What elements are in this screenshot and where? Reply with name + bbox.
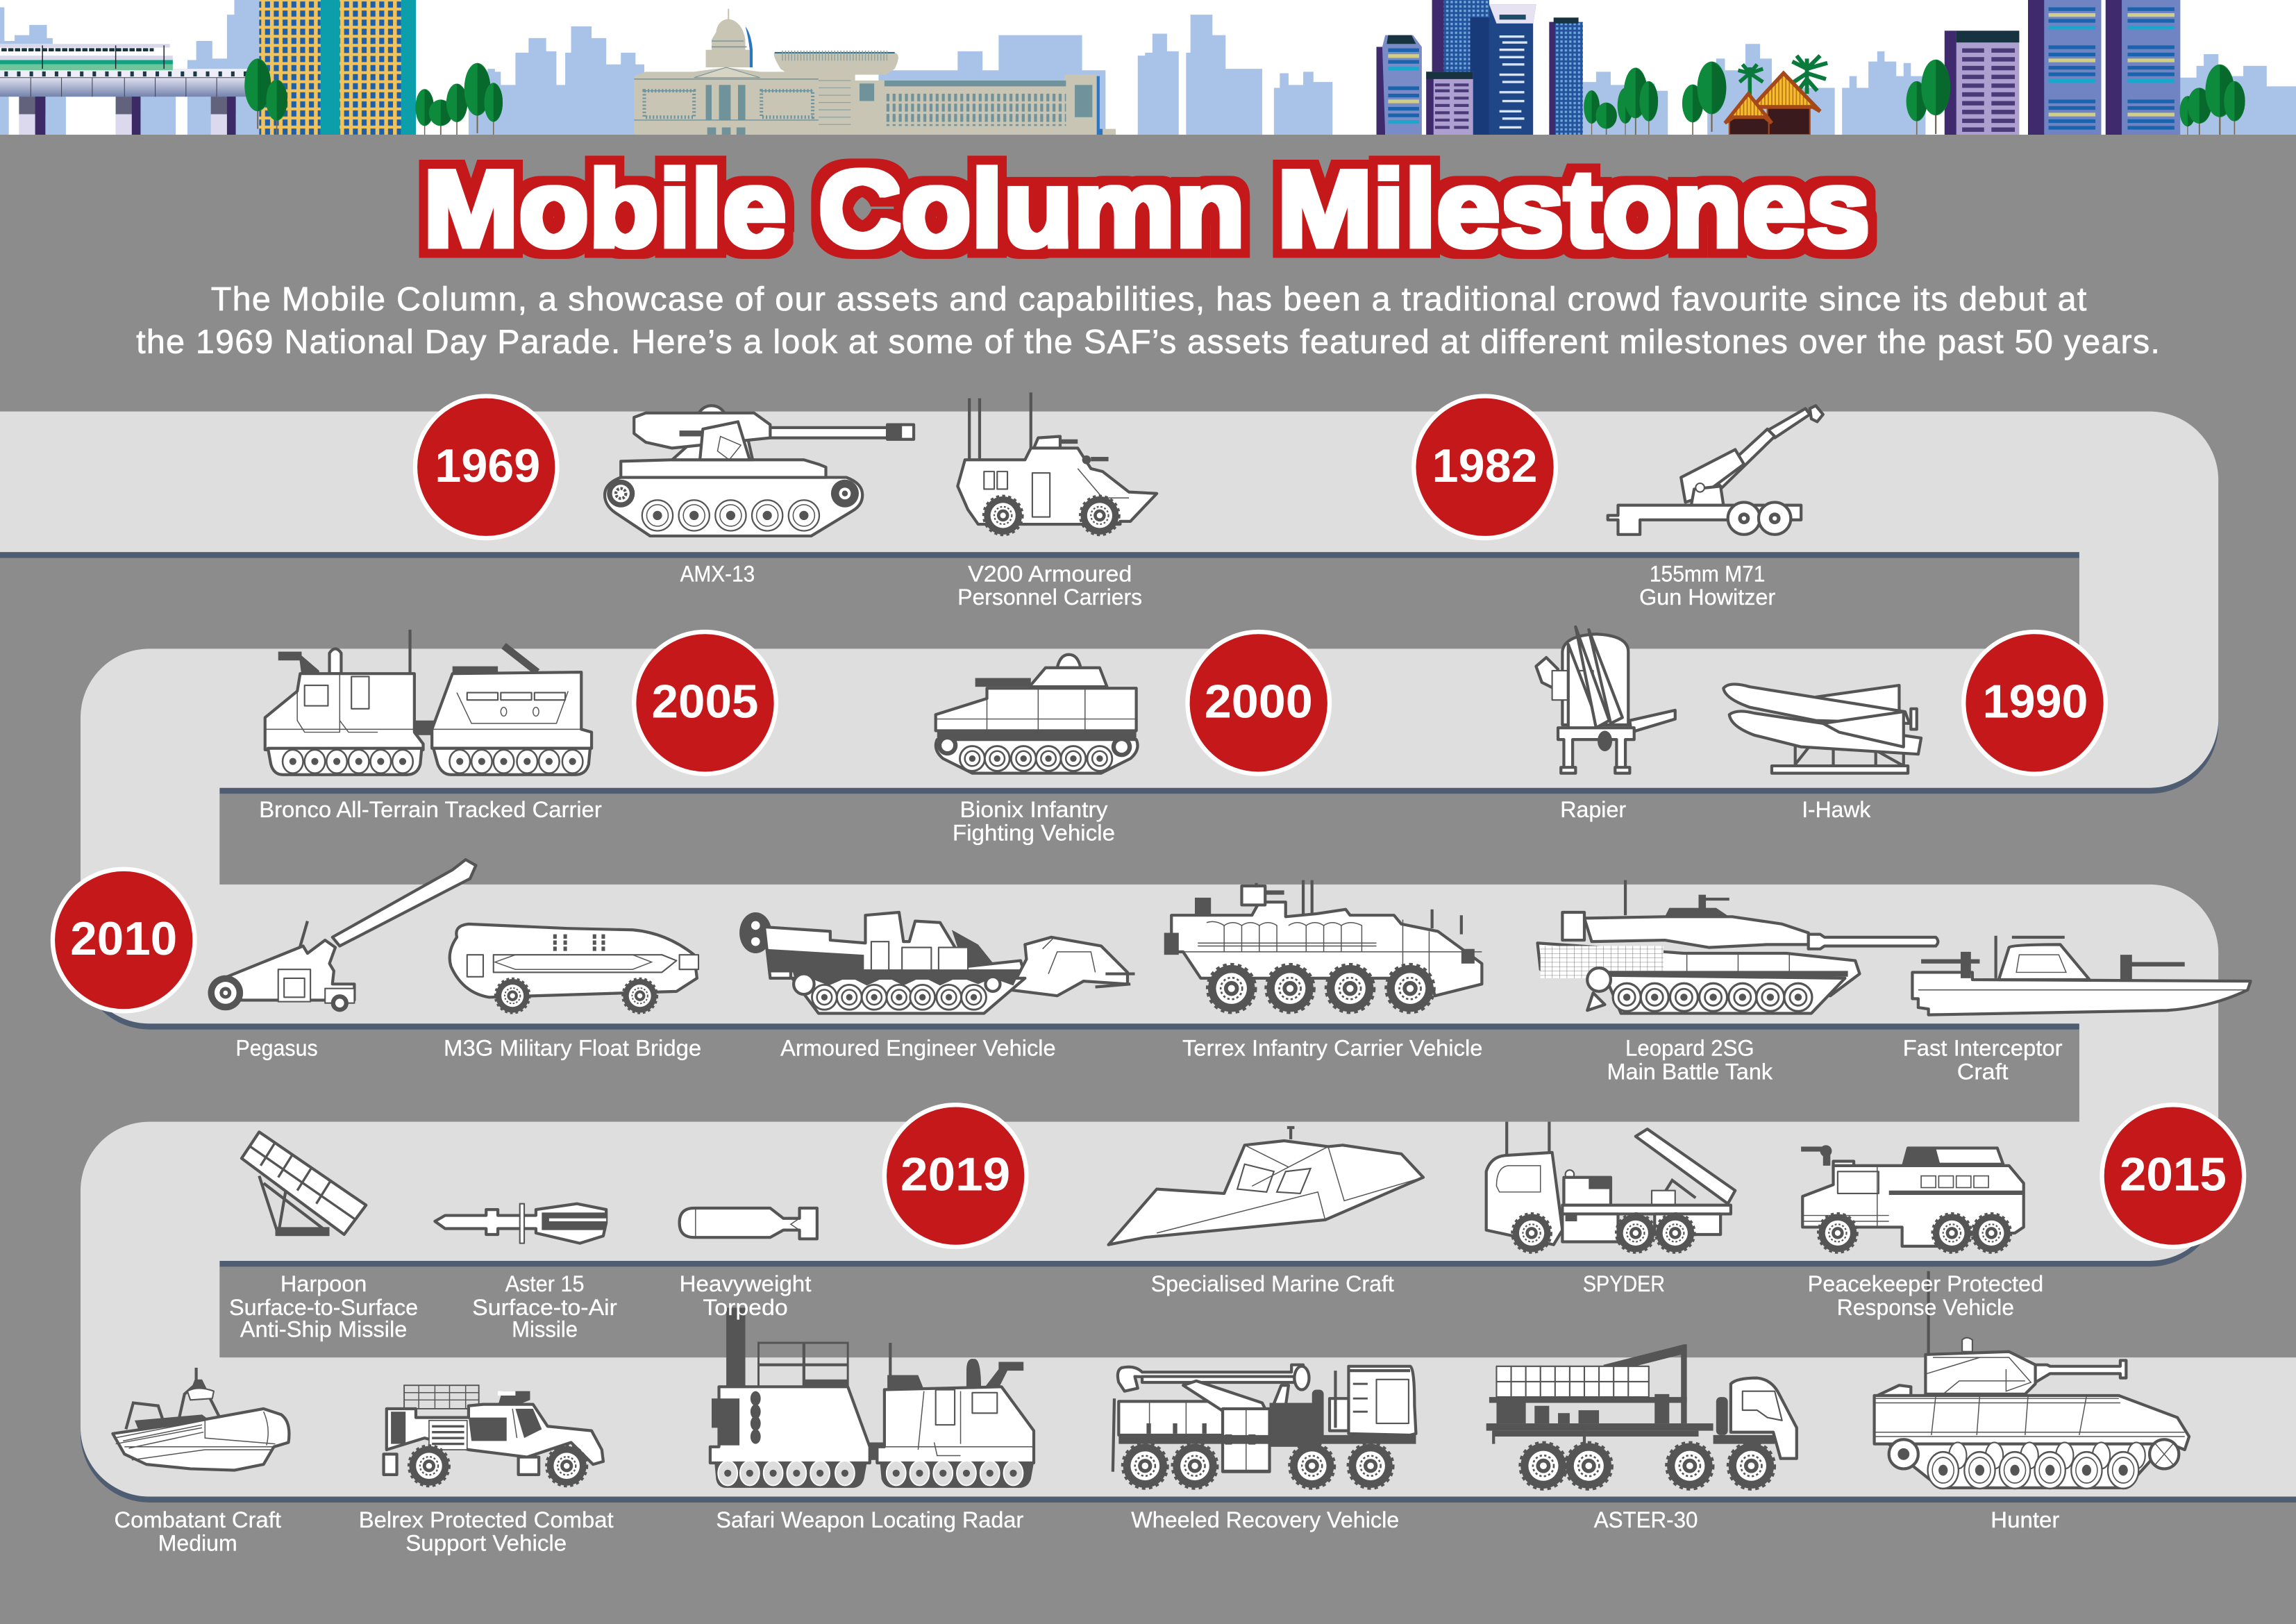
- vehicle: AMX-13: [605, 405, 914, 536]
- label: Combatant Craft: [115, 1507, 281, 1556]
- year badge 2015: 2015: [2120, 1149, 2227, 1201]
- label: Fast Interceptor: [1903, 1035, 2063, 1084]
- label: M71: Gun Howitzer: [1639, 584, 1775, 610]
- label: Rapier: Rapier: [1560, 796, 1626, 822]
- label: Pegasus: Pegasus: [236, 1035, 318, 1061]
- label: M71: [1639, 560, 1775, 610]
- label: V200: V200 Armoured: [968, 560, 1132, 586]
- year badge 2005: 2005: [652, 676, 758, 728]
- label: Armoured Engineer Vehicle: Armoured Engineer Vehicle: [780, 1035, 1056, 1061]
- label: Aster 15: Aster 15: [505, 1271, 585, 1296]
- vehicle: Rapier launcher: [1536, 627, 1675, 773]
- label: Bionix: Bionix Infantry: [960, 796, 1108, 822]
- year badge 2019: 2019: [900, 1149, 1010, 1201]
- year badge 2005: [634, 632, 776, 774]
- label: ASTER-30: ASTER-30: [1594, 1507, 1698, 1532]
- label: Fast Interceptor: Fast Interceptor: [1903, 1035, 2063, 1061]
- label: SPYDER: SPYDER: [1583, 1271, 1665, 1296]
- label: Wheeled Recovery: Wheeled Recovery Vehicle: [1131, 1507, 1399, 1532]
- vehicle: Leopard 2SG main battle tank: [1538, 880, 1938, 1014]
- title: Mobile Column Milestones: [424, 149, 1870, 269]
- vehicle: Bionix infantry fighting vehicle: [936, 655, 1138, 773]
- yellow twin towers: [259, 0, 416, 135]
- vehicle: fast interceptor craft: [1912, 936, 2251, 1015]
- vehicle: Harpoon launcher: [242, 1132, 366, 1236]
- trees left: [244, 58, 503, 138]
- label: Hunter: Hunter: [1991, 1507, 2059, 1532]
- trees and kampung huts: [1584, 56, 2245, 137]
- label: Peacekeeper: [1808, 1271, 2043, 1320]
- label: Harpoon: Harpoon: [280, 1271, 367, 1296]
- intro text: the 1969 National Day Parade. Here’s a look at some of the SAF’s assets featured at different milestones over the past 50 years.: [136, 323, 2160, 360]
- vehicle: Aster 15 missile: [435, 1204, 606, 1244]
- train: [0, 44, 173, 70]
- label: I-Hawk: I-Hawk: [1802, 796, 1871, 822]
- year badge 1969: 1969: [435, 440, 540, 492]
- label: Specialised Marine Craft: Specialised Marine Craft: [1151, 1271, 1394, 1296]
- label: Bionix: Fighting Vehicle: [953, 820, 1115, 846]
- label: Belrex: Support Vehicle: [405, 1530, 567, 1556]
- vehicle: Bronco all-terrain tracked carrier: [265, 630, 592, 775]
- central business district towers: [1377, 0, 2180, 171]
- vehicle: M3G military float bridge: [450, 924, 698, 1013]
- label: Safari: Safari Weapon Locating Radar: [716, 1507, 1023, 1532]
- label: Combatant Craft: Combatant Craft: [115, 1507, 281, 1532]
- year badge 1969: [415, 396, 557, 538]
- label: Bionix: [953, 796, 1115, 846]
- label: V200: [957, 560, 1142, 610]
- year badge 2015: [2102, 1105, 2244, 1247]
- label: Torpedo: [680, 1271, 811, 1320]
- label: Aster 15: Missile: [512, 1316, 578, 1342]
- year badge 1990: 1990: [1983, 676, 2088, 728]
- blue city silhouette: [0, 0, 2296, 135]
- vehicle: SPYDER: [1486, 1122, 1735, 1253]
- label: AMX-13: AMX-13: [680, 560, 755, 586]
- vehicle: heavyweight torpedo: [680, 1208, 817, 1239]
- elevated train line: [0, 44, 258, 135]
- year badge 1982: 1982: [1432, 440, 1538, 492]
- label: Aster 15: [472, 1271, 617, 1342]
- vehicle: Peacekeeper protected response vehicle: [1801, 1145, 2024, 1253]
- label: Leopard: Leopard 2SG: [1625, 1035, 1754, 1061]
- vehicle: V200 armoured personnel carrier: [957, 392, 1157, 535]
- year badge 2019: [885, 1105, 1026, 1247]
- vehicle: Terrex infantry carrier: [1164, 880, 1482, 1012]
- label: M71: 155mm M71: [1650, 560, 1765, 586]
- vehicle: combatant craft medium: [112, 1368, 289, 1471]
- label: Torpedo: Heavyweight: [680, 1271, 811, 1296]
- vehicle: 155mm M71 gun howitzer: [1608, 405, 1823, 535]
- year badge 2010: 2010: [70, 913, 177, 965]
- label: Harpoon: Anti-Ship Missile: [240, 1316, 407, 1342]
- skyline strip: [0, 0, 2296, 171]
- snake road: [0, 412, 2296, 1497]
- vehicle: specialised marine craft: [1109, 1126, 1423, 1245]
- label: Belrex: Belrex Protected Combat: [359, 1507, 614, 1532]
- label: Terrex: Terrex Infantry Carrier Vehicle: [1182, 1035, 1482, 1061]
- year badge 2000: [1187, 632, 1330, 774]
- vehicle: Pegasus howitzer: [208, 860, 476, 1012]
- label: Bronco: Bronco All-Terrain Tracked Carrier: [259, 796, 602, 822]
- label: Peacekeeper: Response Vehicle: [1837, 1294, 2014, 1320]
- label: Combatant Craft: Medium: [158, 1530, 237, 1556]
- vehicle: ASTER-30 launcher: [1486, 1344, 1797, 1489]
- vehicle: armoured engineer vehicle: [739, 912, 1135, 1014]
- year badge 1990: [1963, 632, 2106, 774]
- intro text: The Mobile Column, a showcase of our assets and capabilities, has been a traditional crowd favourite since its debut at: [211, 281, 2087, 318]
- vehicle: wheeled recovery vehicle: [1113, 1365, 1416, 1489]
- label: Belrex: [359, 1507, 614, 1556]
- year badge 2000: 2000: [1205, 676, 1313, 728]
- label: Aster 15: Surface-to-Air: [472, 1294, 617, 1320]
- civic district buildings: [634, 9, 1116, 135]
- snake road shadow: [0, 417, 2296, 1502]
- label: Leopard: [1607, 1035, 1773, 1084]
- vehicle: Safari weapon locating radar: [710, 1307, 1034, 1488]
- vehicle: Belrex protected combat support vehicle: [384, 1385, 603, 1487]
- vehicle: I-Hawk missile launcher: [1723, 684, 1921, 773]
- intro text: [136, 281, 2160, 360]
- year badge 1982: [1414, 396, 1556, 538]
- vehicle: Hunter armoured fighting vehicle: [1875, 1271, 2189, 1489]
- label: Peacekeeper: Peacekeeper Protected: [1808, 1271, 2043, 1296]
- label: Harpoon: Surface-to-Surface: [229, 1294, 418, 1320]
- year badge 2010: [53, 869, 195, 1011]
- label: Harpoon: [229, 1271, 418, 1342]
- label: Torpedo: Torpedo: [703, 1294, 788, 1320]
- label: Fast Interceptor: Craft: [1957, 1058, 2009, 1084]
- label: V200: Personnel Carriers: [957, 584, 1142, 610]
- label: M3G: M3G Military Float Bridge: [444, 1035, 701, 1061]
- label: Leopard: Main Battle Tank: [1607, 1058, 1773, 1084]
